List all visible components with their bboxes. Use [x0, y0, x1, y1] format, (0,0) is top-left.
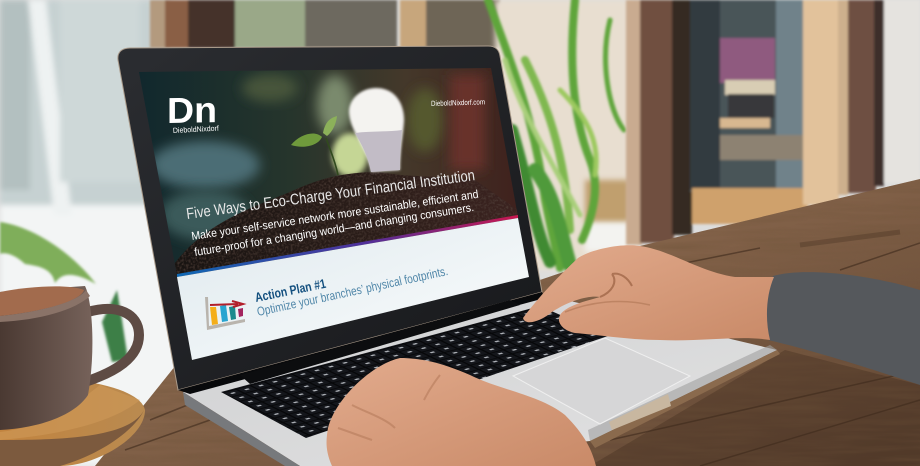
saucer — [0, 379, 145, 466]
laptop base — [183, 295, 780, 466]
trackpad — [513, 338, 690, 424]
left plant — [0, 222, 128, 362]
subheadline: future-proof for a changing world—and changing consumers. — [194, 202, 475, 259]
gradient divider line — [177, 215, 518, 277]
action plan text: Optimize your branches’ physical footprints. — [256, 264, 449, 319]
wooden table — [95, 179, 920, 466]
logo: DieboldNixdorf — [173, 124, 220, 135]
subheadline: Make your self-service network more sustainable, efficient and — [191, 189, 479, 243]
hinge — [240, 300, 520, 384]
light bulb — [349, 88, 404, 172]
headline: Five Ways to Eco-Charge Your Financial Institution — [185, 167, 476, 223]
right hand — [523, 245, 774, 340]
action plan heading: Action Plan #1 — [254, 276, 327, 305]
soil mound — [170, 172, 520, 282]
background: wooden window frame and right wall — [626, 0, 920, 245]
plant leaves — [488, 0, 624, 268]
laptop lid — [118, 46, 545, 394]
coffee mug — [0, 286, 139, 430]
background: wooden post behind laptop — [150, 0, 500, 48]
logo: Dn — [167, 89, 217, 131]
chart icon — [205, 297, 245, 330]
background: left window wall — [0, 0, 190, 466]
sleeve — [766, 272, 920, 385]
keyboard — [221, 306, 608, 438]
mug handle — [85, 309, 139, 382]
website URL: DieboldNixdorf.com — [431, 97, 485, 108]
left hand — [327, 358, 596, 466]
background: centre window and plant — [488, 0, 640, 270]
front notch — [609, 394, 671, 430]
sprout — [291, 116, 338, 175]
screen: hero image — [139, 68, 520, 282]
screen: white panel — [177, 218, 529, 360]
